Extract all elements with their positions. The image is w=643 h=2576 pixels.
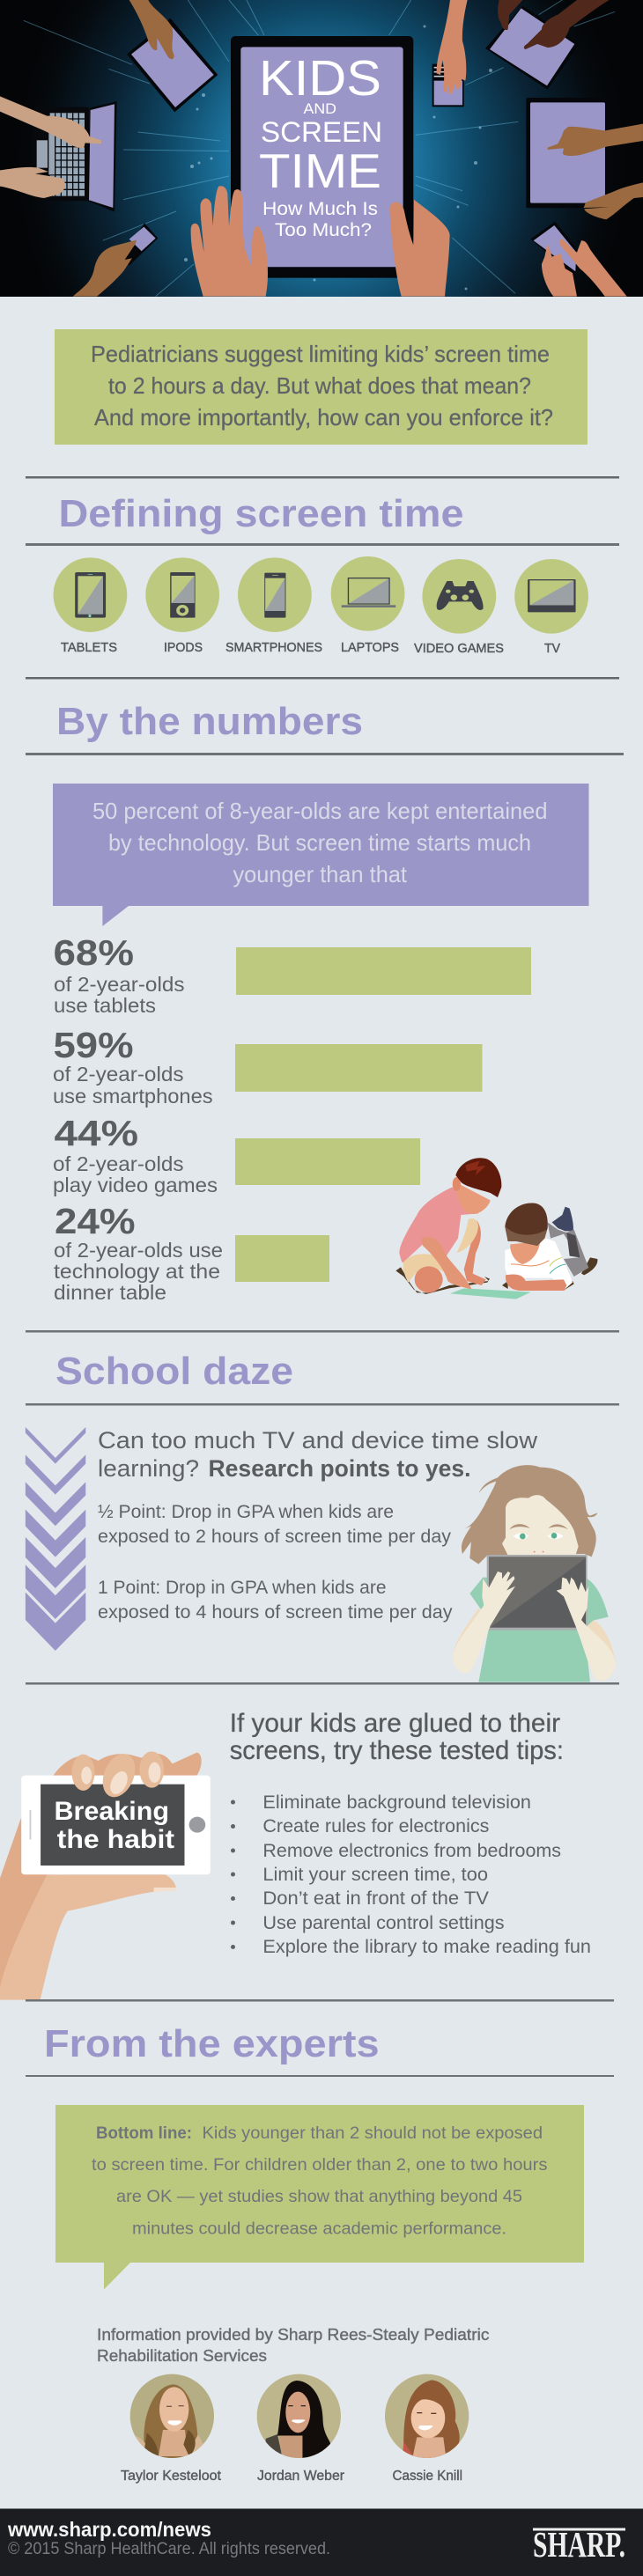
icon: smartphones	[238, 557, 312, 632]
purple callout	[53, 784, 588, 926]
stat: video games: play video games	[53, 1174, 218, 1196]
title: Too Much?	[275, 220, 372, 240]
stat: smartphones	[53, 1025, 483, 1108]
stat: video games: 44%	[55, 1113, 138, 1153]
purple callout: by technology. But screen time starts much	[108, 829, 531, 856]
heading: by the numbers: By the numbers	[56, 700, 363, 743]
stat: smartphones: use smartphones	[53, 1085, 213, 1108]
tips list: Create rules for electronics	[262, 1816, 489, 1836]
tips list: Explore the library to make reading fun	[262, 1937, 591, 1957]
tips list: Eliminate background television	[262, 1792, 531, 1813]
title: KIDS	[259, 50, 381, 107]
expert names: Taylor Kesteloot	[121, 2469, 222, 2484]
stat: tablets: use tablets	[54, 994, 156, 1017]
device labels: LAPTOPS	[341, 641, 399, 655]
tips heading: screens, try these tested tips:	[230, 1736, 564, 1765]
information credit	[97, 2325, 489, 2365]
stat: smartphones: 59%	[53, 1025, 134, 1065]
stat: dinner table	[54, 1201, 329, 1304]
stat: tablets: 68%	[53, 932, 134, 973]
half point fact	[98, 1502, 451, 1547]
heading: from the experts: From the experts	[44, 2022, 380, 2065]
tips list: Remove electronics from bedrooms	[262, 1841, 561, 1861]
school daze question	[98, 1427, 538, 1482]
information credit: Information provided by Sharp Rees-Stealy Pediatric	[97, 2325, 489, 2344]
illustration: girl with tablet	[453, 1465, 616, 1682]
icon: ipods	[145, 557, 219, 632]
icon: chevron stack	[26, 1427, 85, 1651]
footer url: www.sharp.com/news	[7, 2518, 211, 2541]
device icons row	[54, 556, 588, 656]
device labels: TABLETS	[61, 641, 117, 655]
icon: right hand on main tablet	[389, 200, 450, 297]
title	[259, 50, 382, 240]
tips list	[231, 1792, 591, 1957]
green callout: bottom line: are OK — yet studies show that anything beyond 45	[116, 2187, 522, 2206]
photo: Cassie Knill	[385, 2374, 470, 2459]
half point fact: ½ Point: Drop in GPA when kids are	[98, 1502, 394, 1522]
stat: video games: of 2-year-olds	[53, 1152, 183, 1175]
illustration: hand holding phone	[0, 1751, 211, 2000]
tips list: Use parental control settings	[262, 1913, 505, 1933]
photo: Taylor Kesteloot	[129, 2374, 215, 2459]
stat: dinner table: 24%	[55, 1201, 136, 1241]
half point fact: exposed to 2 hours of screen time per day	[98, 1527, 451, 1547]
tips list: Don’t eat in front of the TV	[262, 1888, 489, 1909]
illustration: two boys with a tablet	[395, 1158, 597, 1299]
icon: tablets	[54, 557, 127, 632]
one point fact: exposed to 4 hours of screen time per day	[98, 1602, 453, 1623]
icon: phone top right	[432, 0, 468, 107]
information credit: Rehabilitation Services	[97, 2346, 267, 2365]
icon: left hand on main tablet	[191, 186, 268, 297]
intro callout: to 2 hours a day. But what does that mean?	[108, 372, 531, 399]
green callout: bottom line: minutes could decrease academic performance.	[132, 2219, 506, 2238]
icon: tablet right	[526, 98, 643, 219]
intro callout: And more importantly, how can you enforce it?	[94, 404, 553, 431]
header illustration	[0, 0, 643, 297]
device labels	[61, 641, 560, 656]
icon: laptops	[331, 556, 404, 631]
intro callout	[55, 329, 588, 445]
tips heading: If your kids are glued to their	[230, 1709, 560, 1738]
title: SCREEN	[261, 116, 382, 148]
stat: dinner table: technology at the	[54, 1260, 220, 1283]
footer copyright: © 2015 Sharp HealthCare. All rights reserved.	[8, 2540, 330, 2558]
stat: smartphones: of 2-year-olds	[53, 1063, 183, 1086]
school daze question: learning?	[98, 1455, 199, 1482]
green callout: bottom line: Kids younger than 2 should not be exposed	[203, 2123, 543, 2143]
device labels: VIDEO GAMES	[414, 642, 504, 656]
title: How Much Is	[262, 199, 378, 219]
phone label: breaking the habit	[55, 1797, 174, 1854]
device labels: SMARTPHONES	[225, 641, 322, 655]
school daze question: Can too much TV and device time slow	[98, 1427, 538, 1454]
footer	[0, 2509, 643, 2576]
icon: video games	[422, 559, 496, 634]
device labels: IPODS	[164, 641, 203, 655]
stat: dinner table: of 2-year-olds use	[54, 1239, 223, 1262]
icon: tablet top right	[485, 0, 610, 90]
icon: laptop left	[0, 96, 117, 212]
phone label: breaking the habit: the habit	[57, 1825, 174, 1854]
icon: main tablet	[231, 36, 413, 278]
tips list: Limit your screen time, too	[262, 1865, 488, 1885]
icon: tablet top left	[127, 0, 218, 112]
green callout: bottom line: to screen time. For children older than 2, one to two hours	[92, 2155, 548, 2175]
title: TIME	[259, 144, 381, 198]
expert names	[121, 2469, 462, 2484]
stat: tablets: of 2-year-olds	[54, 973, 185, 996]
green callout: bottom line	[55, 2105, 584, 2289]
expert names: Jordan Weber	[257, 2469, 344, 2484]
intro callout: Pediatricians suggest limiting kids’ screen time	[91, 341, 550, 367]
heading: defining screen time: Defining screen time	[58, 492, 463, 535]
purple callout: younger than that	[233, 861, 408, 887]
stat: video games	[53, 1113, 420, 1196]
tips heading	[230, 1709, 564, 1765]
purple callout: 50 percent of 8-year-olds are kept entertained	[92, 798, 548, 824]
device labels: TV	[544, 642, 560, 656]
stat: dinner table: dinner table	[54, 1281, 166, 1304]
one point fact	[98, 1578, 453, 1623]
green callout: bottom line: Bottom line:	[96, 2123, 192, 2143]
one point fact: 1 Point: Drop in GPA when kids are	[98, 1578, 386, 1598]
phone label: breaking the habit: Breaking	[55, 1797, 169, 1826]
title: AND	[303, 100, 336, 117]
icon: phone bottom right	[530, 222, 627, 297]
icon: tv	[514, 559, 588, 634]
photo: Jordan Weber	[256, 2374, 343, 2459]
stat: tablets	[53, 932, 531, 1017]
school daze question: Research points to yes.	[208, 1455, 470, 1482]
expert names: Cassie Knill	[393, 2469, 462, 2484]
heading: school daze: School daze	[55, 1350, 293, 1393]
icon: phone bottom left	[73, 223, 158, 297]
